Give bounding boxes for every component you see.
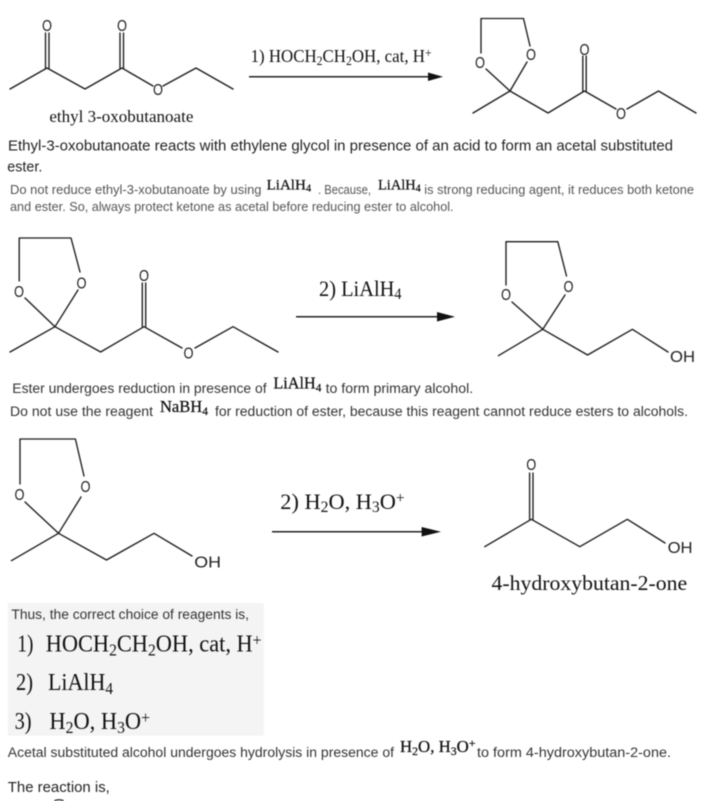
note: acetal hydrolysis: to form 4-hydroxybutan-2-one. xyxy=(477,745,671,760)
note: do not use NaBH4: Do not use the reagent xyxy=(10,404,153,419)
molecule: acetal ester, step 2 reactant: O xyxy=(184,346,194,362)
molecule: acetal substituted ester: O xyxy=(580,42,590,59)
paragraph: acetal formation xyxy=(7,138,673,176)
note: ester reduction xyxy=(12,374,473,396)
arrow: step 1 xyxy=(249,72,443,81)
reagent label: step 1: 1) HOCH2CH2OH, cat, H+ xyxy=(251,46,432,68)
molecule: ethyl 3-oxobutanoate xyxy=(10,18,233,99)
note: do not use NaBH4: NaBH4 xyxy=(160,397,208,418)
molecule: acetal substituted ester: O xyxy=(616,106,626,123)
molecule: acetal alcohol, step 3 reactant: OH xyxy=(194,554,221,572)
molecule: acetal alcohol, step 2 product: O xyxy=(501,287,511,304)
note: do not reduce directly: . Because, xyxy=(318,182,371,197)
molecule: 4-hydroxybutan-2-one: O xyxy=(526,457,536,474)
molecule: 4-hydroxybutan-2-one: OH xyxy=(668,540,693,557)
reagent 1: HOCH2CH2OH, cat, H+ xyxy=(46,630,262,659)
molecule name: 4-hydroxybutan-2-one: 4-hydroxybutan-2-one xyxy=(492,571,687,595)
note: acetal hydrolysis: H2O, H3O+ xyxy=(400,736,476,758)
note: acetal hydrolysis xyxy=(8,736,671,760)
molecule: acetal substituted ester: O xyxy=(526,47,536,64)
molecule: acetal substituted ester: O xyxy=(475,55,485,72)
reagent label: step 3: 2) H2O, H3O+ xyxy=(280,489,405,516)
arrow: step 2 xyxy=(296,312,455,322)
reagent label: step 2: 2) LiAlH4 xyxy=(319,276,402,303)
molecule: acetal substituted ester xyxy=(473,18,696,123)
note: do not reduce directly xyxy=(10,178,694,214)
reagent 3: H2O, H3O+ xyxy=(49,708,150,737)
molecule: acetal ester, step 2 reactant: O xyxy=(14,284,24,301)
note: ester reduction: Ester undergoes reduction in presence of xyxy=(12,381,267,396)
note: do not use NaBH4: for reduction of ester, because this reagent cannot reduce esters to alcohols. xyxy=(215,404,688,419)
cropped molecule top xyxy=(55,799,63,801)
molecule: ethyl 3-oxobutanoate: O xyxy=(42,18,52,35)
text: the reaction is: The reaction is, xyxy=(8,779,110,796)
reagent 2: 2) xyxy=(16,670,33,696)
molecule: acetal ester, step 2 reactant: O xyxy=(139,268,149,285)
note: ester reduction: LiAlH4 xyxy=(273,374,322,394)
molecule: acetal ester, step 2 reactant xyxy=(10,238,278,362)
molecule: ethyl 3-oxobutanoate: O xyxy=(153,82,163,99)
panel: correct reagents xyxy=(8,603,264,737)
note: do not reduce directly: and ester. So, always protect ketone as acetal before reducing ester to alcohol. xyxy=(10,199,454,214)
reagent 2 xyxy=(16,670,114,698)
molecule name: ethyl 3-oxobutanoate: ethyl 3-oxobutanoate xyxy=(49,107,193,126)
molecule: acetal alcohol, step 3 reactant: O xyxy=(14,487,24,504)
molecule: 4-hydroxybutan-2-one xyxy=(485,457,693,557)
molecule: acetal alcohol, step 3 reactant: O xyxy=(80,479,90,496)
note: do not reduce directly: is strong reducing agent, it reduces both ketone xyxy=(424,182,694,197)
reagent 3: 3) xyxy=(15,709,32,735)
note: do not use NaBH4 xyxy=(10,397,688,419)
note: ester reduction: to form primary alcohol. xyxy=(326,381,473,396)
note: do not reduce directly: LiAlH4 xyxy=(267,178,312,195)
molecule: acetal alcohol, step 2 product: OH xyxy=(670,349,695,366)
paragraph: acetal formation: ester. xyxy=(7,158,42,176)
arrow: step 3 xyxy=(272,527,441,536)
paragraph: acetal formation: Ethyl-3-oxobutanoate reacts with ethylene glycol in presence of an acid to form an acetal substituted xyxy=(8,138,673,154)
note: do not reduce directly: Do not reduce ethyl-3-xobutanoate by using xyxy=(10,182,262,197)
molecule: acetal alcohol, step 2 product xyxy=(498,242,695,366)
reagent 1: 1) xyxy=(17,632,33,658)
panel heading: Thus, the correct choice of reagents is, xyxy=(11,607,249,622)
molecule: acetal ester, step 2 reactant: O xyxy=(76,276,86,292)
note: acetal hydrolysis: Acetal substituted alcohol undergoes hydrolysis in presence of xyxy=(8,745,394,760)
molecule: acetal alcohol, step 3 reactant xyxy=(11,439,221,572)
molecule: acetal alcohol, step 2 product: O xyxy=(564,279,574,296)
reagent 2: LiAlH4 xyxy=(48,670,114,698)
molecule: ethyl 3-oxobutanoate: O xyxy=(117,18,127,35)
note: do not reduce directly: LiAlH4 xyxy=(378,178,421,195)
